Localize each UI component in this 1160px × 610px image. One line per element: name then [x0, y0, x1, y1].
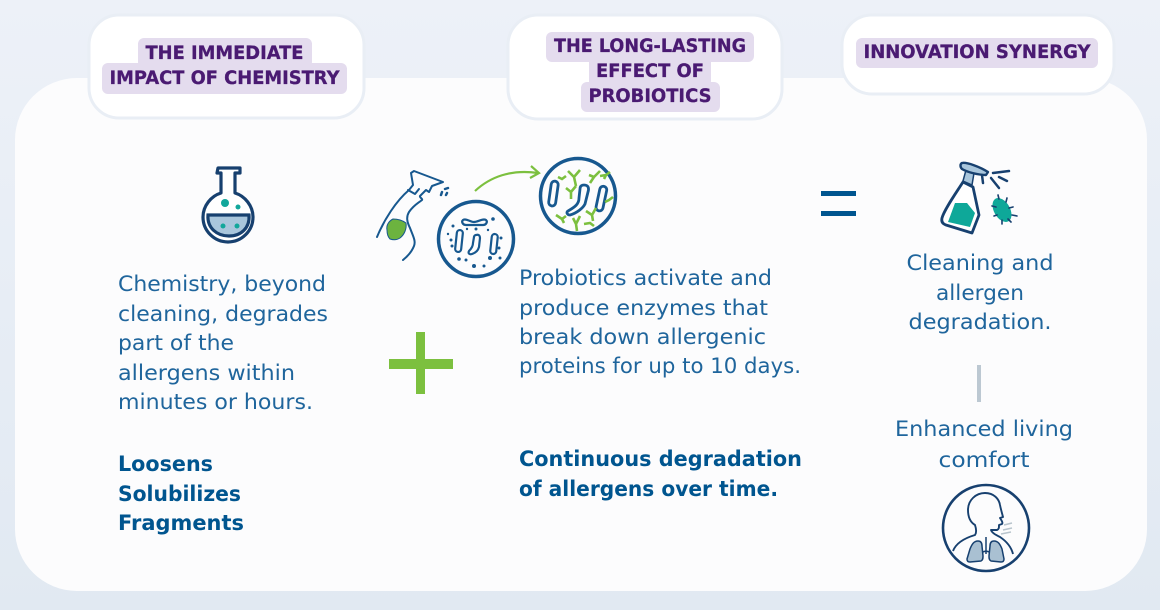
text: chemistry actions: Solubilizes — [118, 482, 241, 507]
text: probiotics result — [519, 447, 802, 502]
text: chemistry actions: Fragments — [118, 511, 244, 536]
text: probiotics description: proteins for up to 10 days. — [519, 354, 801, 378]
text: enhanced living comfort: comfort — [938, 448, 1030, 472]
icon: spray bottle with probiotics — [377, 171, 448, 260]
icon: equals — [821, 191, 856, 216]
heading: immediate impact of chemistry: THE IMMEDIATE — [146, 43, 304, 64]
text: cleaning and allergen degradation: allergen — [936, 281, 1024, 305]
heading: innovation synergy — [842, 15, 1114, 94]
arrow: green curved — [475, 166, 539, 191]
icon: spray bottle with germ — [942, 163, 1017, 233]
heading: long-lasting effect of probiotics: PROBIOTICS — [588, 86, 712, 107]
icon: flask — [203, 168, 253, 242]
text: chemistry description: allergens within — [118, 361, 295, 385]
heading: long-lasting effect of probiotics: EFFECT OF — [596, 61, 704, 82]
icon: person with lungs — [943, 485, 1029, 571]
heading: immediate impact of chemistry: IMPACT OF CHEMISTRY — [110, 68, 340, 89]
text: cleaning and allergen degradation: Cleaning and — [906, 251, 1054, 275]
text: probiotics description: produce enzymes that — [519, 296, 768, 320]
heading: immediate impact of chemistry — [89, 15, 364, 118]
text: probiotics description — [519, 266, 801, 378]
divider — [977, 365, 981, 402]
text: chemistry description: cleaning, degrades — [118, 302, 328, 326]
text: enhanced living comfort — [895, 417, 1073, 472]
text: probiotics result: of allergens over time. — [519, 477, 778, 502]
text: probiotics description: Probiotics activate and — [519, 266, 772, 290]
text: probiotics description: break down allergenic — [519, 325, 766, 349]
text: chemistry actions: Loosens — [118, 452, 213, 477]
heading: long-lasting effect of probiotics — [508, 15, 782, 119]
text: chemistry actions — [118, 452, 244, 536]
heading: long-lasting effect of probiotics: THE LONG-LASTING — [554, 36, 746, 57]
icon: probiotics circle before — [438, 202, 514, 276]
icon: plus — [389, 332, 453, 394]
text: enhanced living comfort: Enhanced living — [895, 417, 1073, 441]
heading: innovation synergy: INNOVATION SYNERGY — [864, 42, 1091, 63]
text: cleaning and allergen degradation: degradation. — [908, 310, 1052, 334]
text: chemistry description — [118, 272, 328, 414]
text: chemistry description: part of the — [118, 331, 234, 355]
icon: probiotics circle after — [540, 158, 616, 234]
text: chemistry description: Chemistry, beyond — [118, 272, 326, 296]
text: probiotics result: Continuous degradation — [519, 447, 802, 472]
text: cleaning and allergen degradation — [906, 251, 1054, 334]
text: chemistry description: minutes or hours. — [118, 390, 313, 414]
